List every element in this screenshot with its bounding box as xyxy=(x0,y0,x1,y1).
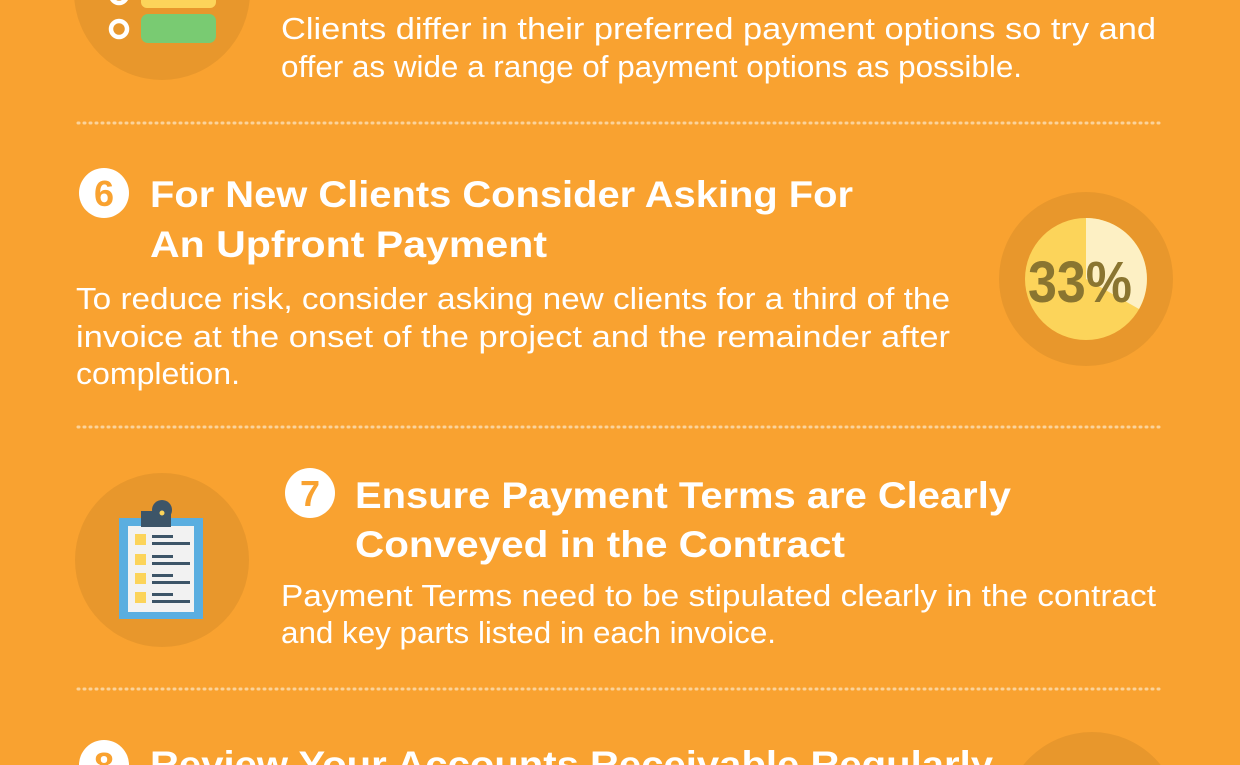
text: section 7 body: Payment Terms need to be stipulated clearly in the contract xyxy=(281,579,1157,613)
icon: number 8 xyxy=(79,740,129,765)
chart: 33% pie: 33% xyxy=(1028,250,1132,315)
text: section 6 body: completion. xyxy=(76,357,240,391)
icon: payment options xyxy=(74,0,250,80)
heading 7 xyxy=(355,475,1011,565)
text: section 6 body xyxy=(76,282,950,391)
text: payment options body xyxy=(281,12,1156,84)
heading 7: Conveyed in the Contract xyxy=(355,524,845,565)
text: payment options body: Clients differ in their preferred payment options so try and xyxy=(281,12,1156,46)
icon: number 6 xyxy=(79,168,129,218)
text: section 7 body xyxy=(281,579,1157,650)
heading 6: An Upfront Payment xyxy=(150,224,547,265)
heading 6: For New Clients Consider Asking For xyxy=(150,174,853,215)
chart: 33% pie xyxy=(999,192,1173,366)
text: section 6 body: To reduce risk, consider asking new clients for a third of the xyxy=(76,282,950,316)
text: payment options body: offer as wide a range of payment options as possible. xyxy=(281,50,1022,84)
icon: number 6: 6 xyxy=(94,173,114,214)
heading 7: Ensure Payment Terms are Clearly xyxy=(355,475,1011,516)
text: section 7 body: and key parts listed in each invoice. xyxy=(281,616,776,650)
icon: clipboard xyxy=(75,473,249,647)
icon: section 8 circle xyxy=(1004,732,1180,765)
icon: number 7: 7 xyxy=(300,473,320,514)
icon: number 7 xyxy=(285,468,335,518)
text: section 6 body: invoice at the onset of the project and the remainder after xyxy=(76,320,950,354)
heading 6 xyxy=(150,174,853,265)
